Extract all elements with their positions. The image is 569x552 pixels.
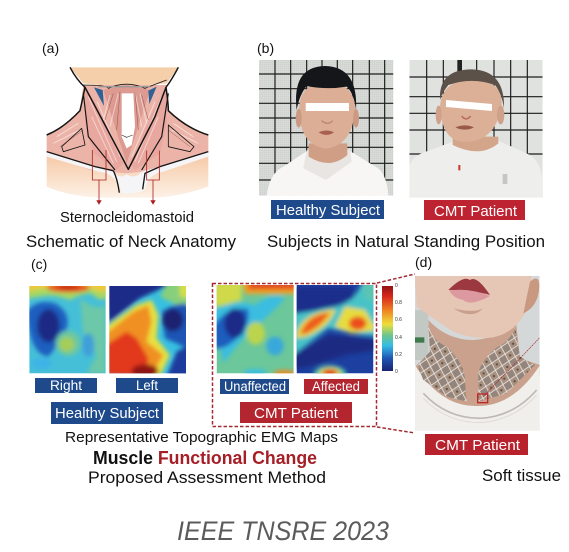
label (b): (b) [257, 40, 274, 56]
tag: CMT Patient [240, 402, 352, 423]
eye privacy bar, patient [446, 100, 492, 111]
colorbar with scale: 0 [395, 283, 398, 289]
tag: CMT Patient: CMT Patient [254, 405, 339, 422]
photo: neck with soft electrode array [415, 276, 549, 431]
colorbar with scale: 0.8 [395, 300, 402, 306]
photo: CMT patient [409, 60, 543, 198]
tag: Left: Left [136, 378, 158, 393]
panel d: neck sensor photo [415, 254, 561, 485]
colorbar with scale [382, 283, 402, 375]
footer: IEEE TNSRE 2023: IEEE TNSRE 2023 [177, 516, 389, 546]
tag: CMT Patient [425, 434, 528, 455]
neck anatomy illustration [47, 67, 208, 198]
red bracket arrows [92, 150, 159, 204]
tag: Healthy Subject: Healthy Subject [276, 202, 381, 219]
tag: CMT Patient: CMT Patient [434, 203, 518, 220]
caption: Representative Topographic EMG Maps: Representative Topographic EMG Maps [65, 430, 338, 446]
panel a: neck anatomy [26, 40, 236, 251]
caption: Muscle Functional Change: Muscle Functional Change [93, 448, 317, 468]
heatmap: healthy left [109, 286, 186, 374]
tag: CMT Patient [424, 200, 525, 220]
label: Sternocleidomastoid: Sternocleidomastoid [60, 210, 194, 226]
colorbar with scale: 0.4 [395, 335, 402, 341]
caption: Soft tissue: Soft tissue [482, 466, 561, 485]
colorbar with scale: 0.2 [395, 352, 402, 358]
panel c: EMG maps [23, 256, 415, 487]
label (d): (d) [415, 254, 432, 270]
label (c): (c) [31, 256, 47, 272]
heatmap: unaffected [216, 285, 294, 374]
tag: Unaffected: Unaffected [224, 379, 286, 394]
caption: Proposed Assessment Method: Proposed Assessment Method [88, 468, 326, 487]
tag: Right: Right [50, 378, 82, 393]
photo: healthy subject [259, 60, 393, 196]
heatmap: healthy right [29, 286, 106, 374]
tag: Right [35, 378, 97, 393]
label (a): (a) [42, 40, 59, 56]
tag: Affected: Affected [312, 379, 360, 394]
dashed box: CMT maps with zoom lines [212, 274, 415, 433]
tag: CMT Patient: CMT Patient [435, 437, 521, 454]
heading: Schematic of Neck Anatomy: Schematic of Neck Anatomy [26, 232, 236, 251]
panel b: standing subjects [257, 40, 545, 251]
tag: Left [116, 378, 178, 393]
heatmap: affected [296, 285, 374, 374]
heading: Subjects in Natural Standing Position: Subjects in Natural Standing Position [267, 232, 545, 251]
colorbar with scale: 0 [395, 369, 398, 375]
eye privacy bar, healthy [306, 103, 349, 111]
tag: Healthy Subject: Healthy Subject [55, 405, 160, 422]
colorbar with scale: 0.6 [395, 317, 402, 323]
